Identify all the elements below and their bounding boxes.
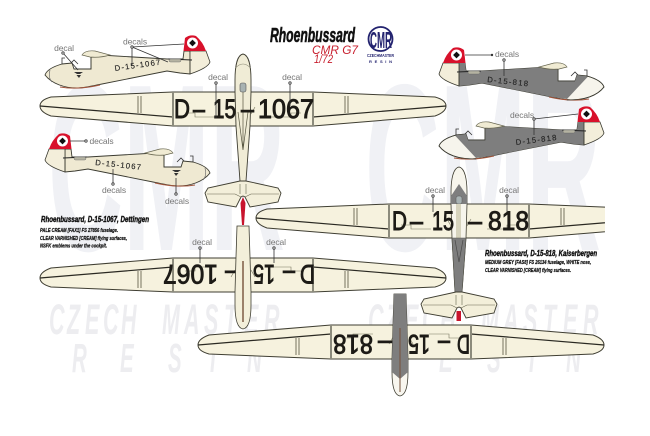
caption: D-15-1067: PALE CREAM [FAX1] FS 27856 fuselage. xyxy=(40,228,118,234)
top view: D-15-1067 upper surface xyxy=(40,54,446,225)
top view: D-15-1067 lower surface xyxy=(40,226,446,329)
caption: D-15-818: Rhoenbussard, D-15-818, Kaiserbergen xyxy=(485,249,597,258)
rudder: red xyxy=(240,197,246,225)
side view: D-15-1067 starboard: D-15-1067 xyxy=(95,158,141,172)
centre line xyxy=(400,328,401,392)
callouts: lower surface 1067: decal xyxy=(192,237,212,247)
callouts: upper surface 818: decal xyxy=(499,185,519,195)
logo: Czech Master Resin: R E S I N xyxy=(369,59,392,64)
caption: D-15-818: MEDIUM GREY [FAS8] FS 26134 fuselage, WHITE nose, xyxy=(485,260,591,266)
watermark: left Czech Master xyxy=(49,296,280,344)
registration D-15-1067 inverted: – xyxy=(283,259,295,289)
registration D-15-818: 818 xyxy=(488,206,529,236)
registration D-15-818: 15 xyxy=(432,206,454,236)
callouts: port side 818: decals xyxy=(510,110,534,120)
callouts: upper surface 818 xyxy=(425,185,519,212)
watermark: right Czech Master: CZECH xyxy=(368,296,456,344)
registration D-15-1067: 15 xyxy=(213,94,236,124)
callouts: starboard side 818 xyxy=(465,49,519,76)
callouts: upper surface 818: decal xyxy=(425,185,445,195)
callouts: starboard side 1067 xyxy=(70,136,189,206)
side view: D-15-818 starboard xyxy=(439,47,604,100)
centre line xyxy=(242,261,244,322)
callouts: port side 1067: decal xyxy=(54,43,74,53)
registration D-15-1067 xyxy=(174,94,314,124)
registration D-15-818 inverted: 15 xyxy=(408,329,430,359)
registration D-15-1067: – xyxy=(241,94,254,124)
callouts: starboard side 1067: decals xyxy=(90,136,113,146)
callouts: upper surface 1067: decal xyxy=(282,72,302,82)
registration D-15-1067: 1067 xyxy=(258,94,314,124)
registration D-15-818 inverted: – xyxy=(438,329,450,359)
caption: D-15-818 xyxy=(485,249,597,274)
registration D-15-1067 inverted xyxy=(163,259,315,289)
registration D-15-818 inverted: – xyxy=(378,329,392,359)
caption: D-15-1067: NSFK emblems under the cockpit. xyxy=(40,244,107,250)
scale: 1/72 xyxy=(314,52,333,66)
caption: D-15-1067: Rhoenbussard, D-15-1067, Dettingen xyxy=(41,215,149,224)
watermark: right Czech Master: MASTER xyxy=(481,296,599,344)
registration D-15-1067: – xyxy=(193,94,205,124)
watermark: left Czech Master: CZECH xyxy=(49,296,137,344)
registration D-15-818: – xyxy=(410,206,423,236)
side view: D-15-1067 starboard xyxy=(45,133,210,186)
callouts: starboard side 818: decals xyxy=(495,49,519,59)
side view: D-15-818 port xyxy=(439,106,604,159)
registration D-15-1067 inverted: – xyxy=(225,259,235,289)
side view: D-15-818 port: D-15-818 xyxy=(515,133,557,147)
product code: CMR G7 xyxy=(312,43,359,57)
logo: Czech Master Resin xyxy=(367,27,395,64)
side view: D-15-1067 port: D-15-1067 xyxy=(114,58,161,73)
top view: D-15-818 upper surface xyxy=(256,166,605,321)
caption: D-15-818: CLEAR VARNISHED [CREAM] flying surfaces. xyxy=(485,268,571,274)
registration D-15-1067 inverted: 1067 xyxy=(163,259,218,289)
watermark: left Resin: RESIN xyxy=(72,335,262,381)
registration D-15-818: D xyxy=(392,206,407,236)
registration D-15-1067 inverted: 15 xyxy=(253,259,275,289)
logo: Czech Master Resin: CZECHMASTER xyxy=(367,53,395,58)
callouts: starboard side 1067: decals xyxy=(165,196,189,206)
callouts: lower surface 1067: decal xyxy=(266,237,286,247)
registration D-15-818 xyxy=(393,210,528,231)
watermark: right Czech Master xyxy=(368,296,599,344)
text: CMR xyxy=(48,36,285,301)
callouts: port side 1067 xyxy=(54,36,184,70)
top view: D-15-818 lower surface xyxy=(198,294,604,396)
title: Rhoenbussard xyxy=(270,25,355,47)
watermark: left Czech Master: MASTER xyxy=(162,296,280,344)
rudder: red xyxy=(456,311,461,321)
text: CMR xyxy=(370,27,392,53)
caption: D-15-1067 xyxy=(40,215,149,250)
callouts: port side 818 xyxy=(510,110,578,135)
side view: D-15-1067 port xyxy=(45,35,210,88)
callouts: starboard side 1067: decals xyxy=(102,185,126,195)
registration D-15-818 inverted: D xyxy=(457,329,470,359)
side view: D-15-818 starboard: D-15-818 xyxy=(487,75,529,88)
registration D-15-818 inverted xyxy=(334,334,469,354)
registration D-15-1067: D xyxy=(174,94,190,124)
callouts: port side 1067: decals xyxy=(123,36,147,46)
registration D-15-818: – xyxy=(468,206,482,236)
callouts: upper surface 1067: decal xyxy=(208,72,228,82)
callouts: lower surface 1067 xyxy=(192,237,286,263)
caption: D-15-1067: CLEAR VARNISHED [CREAM] flying surfaces, xyxy=(40,236,127,242)
callouts: upper surface 1067 xyxy=(208,72,302,118)
registration D-15-818 inverted: 818 xyxy=(333,329,373,359)
watermark: right Resin: RESIN xyxy=(391,335,581,381)
registration D-15-1067 inverted: D xyxy=(300,259,315,289)
